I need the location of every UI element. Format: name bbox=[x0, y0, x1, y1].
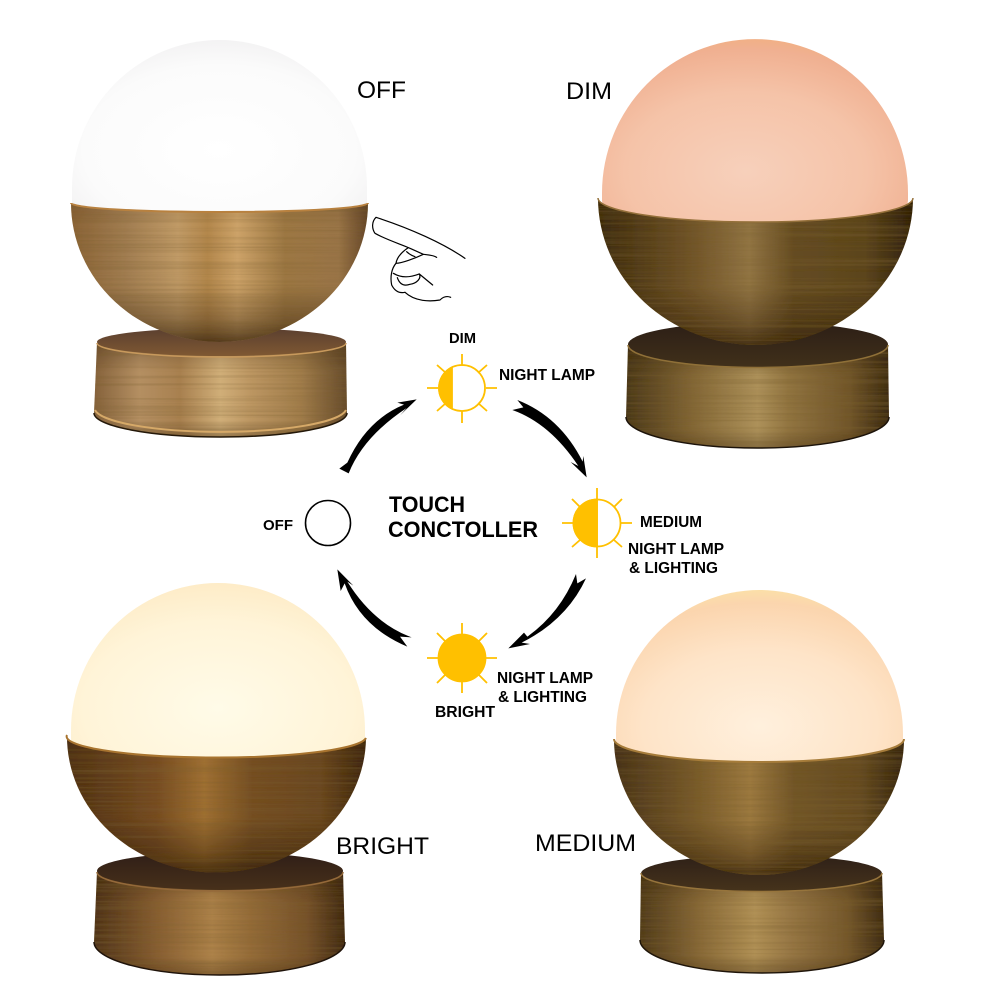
icon: off circle bbox=[306, 500, 350, 546]
arrow: off to dim bbox=[339, 399, 417, 473]
text: night lamp and lighting, medium bbox=[628, 541, 724, 577]
text: night lamp and lighting, bright: & LIGHTING bbox=[498, 689, 587, 706]
arrow: medium to bright bbox=[508, 574, 586, 648]
label: MEDIUM: MEDIUM bbox=[535, 830, 636, 857]
icon: medium sun bbox=[562, 488, 632, 558]
text: night lamp and lighting, medium: NIGHT LAMP bbox=[628, 541, 724, 558]
metal bowl bbox=[71, 203, 368, 342]
metal bowl bbox=[614, 739, 904, 875]
icon: pointing hand bbox=[373, 217, 465, 301]
lamp base bbox=[94, 852, 345, 975]
text: dim: DIM bbox=[449, 330, 476, 347]
lamp base bbox=[94, 328, 347, 437]
text: night lamp and lighting, bright: NIGHT LAMP bbox=[497, 670, 593, 687]
text: night lamp and lighting, bright bbox=[497, 670, 593, 706]
icon: dim sun bbox=[427, 354, 497, 423]
glass globe bbox=[72, 40, 367, 223]
cycle diagram title: TOUCH bbox=[389, 492, 465, 517]
glass globe bbox=[71, 583, 365, 772]
text: night lamp: NIGHT LAMP bbox=[499, 367, 595, 384]
icon: bright sun bbox=[427, 623, 497, 693]
glass globe bbox=[602, 39, 908, 240]
label: BRIGHT: BRIGHT bbox=[336, 833, 429, 860]
lamp base bbox=[640, 855, 884, 973]
text: off: OFF bbox=[263, 517, 293, 534]
lamp: off bbox=[71, 40, 368, 437]
arrow: dim to medium bbox=[512, 400, 587, 477]
lamp: medium bbox=[614, 590, 904, 973]
cycle diagram title bbox=[388, 492, 538, 542]
text: bright: BRIGHT bbox=[435, 704, 495, 721]
metal bowl bbox=[598, 198, 913, 345]
lamp base bbox=[626, 322, 889, 448]
metal bowl bbox=[67, 735, 366, 873]
text: medium: MEDIUM bbox=[640, 514, 702, 531]
cycle diagram title: CONCTOLLER bbox=[388, 517, 538, 542]
glass globe bbox=[616, 590, 903, 779]
lamp: dim bbox=[598, 39, 913, 448]
arrow: bright to off bbox=[337, 569, 412, 647]
label: DIM: DIM bbox=[566, 78, 612, 105]
text: night lamp and lighting, medium: & LIGHTING bbox=[629, 560, 718, 577]
lamp: bright bbox=[67, 583, 366, 975]
label: OFF: OFF bbox=[357, 77, 406, 104]
